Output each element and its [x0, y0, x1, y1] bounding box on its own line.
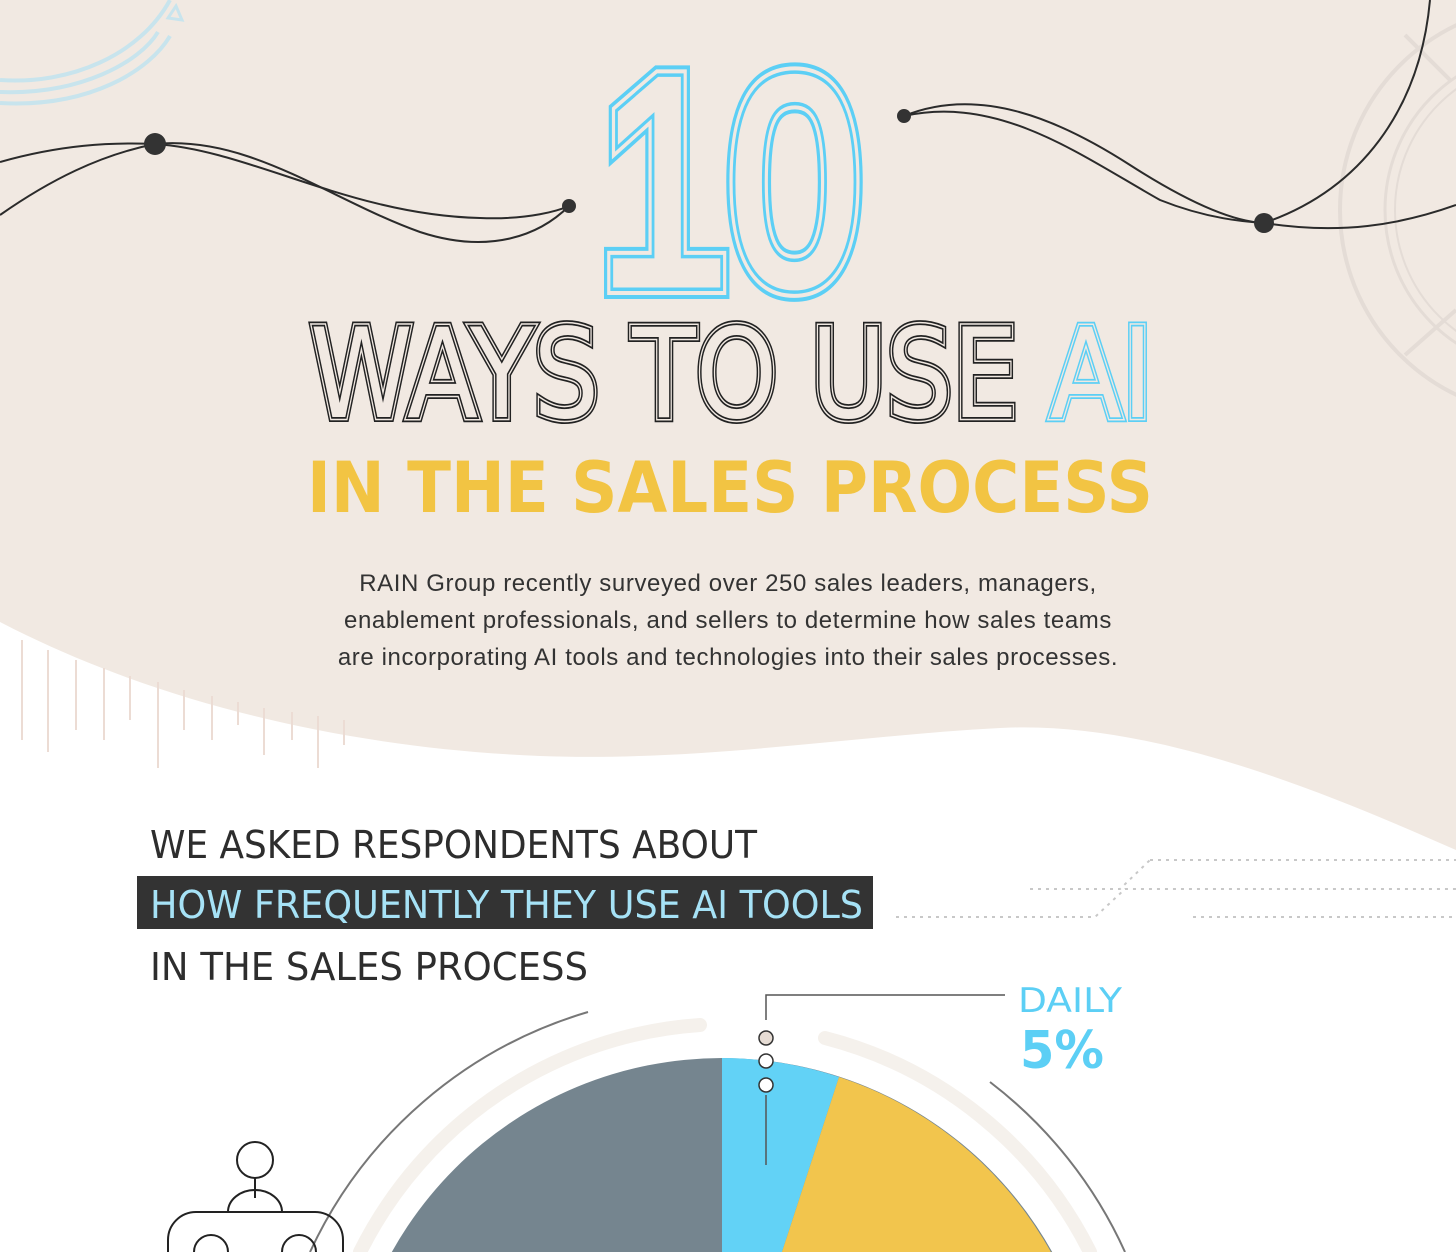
intro paragraph	[338, 570, 1118, 671]
title: ways to use ai: AI	[1050, 303, 1153, 447]
question heading: WE ASKED RESPONDENTS ABOUT	[150, 823, 758, 867]
decoration: top-right gray circles	[1340, 5, 1456, 415]
title: 10: 10	[598, 16, 860, 347]
intro paragraph: RAIN Group recently surveyed over 250 sales leaders, managers,	[359, 570, 1097, 597]
title: ways to use ai: WAYS TO USE	[310, 303, 1018, 447]
title: 10: 10	[598, 16, 860, 347]
question heading	[137, 823, 873, 989]
subtitle: IN THE SALES PROCESS	[307, 447, 1153, 529]
title: ways to use ai: WAYS TO USE	[310, 303, 1018, 447]
title: 10: 10	[598, 16, 860, 347]
title: ways to use ai: AI	[1050, 303, 1153, 447]
background beige wave	[0, 0, 1456, 850]
pie chart	[310, 1012, 1125, 1252]
title: ways to use ai: WAYS TO USE	[310, 303, 1018, 447]
question heading: HOW FREQUENTLY THEY USE AI TOOLS	[150, 883, 863, 927]
intro paragraph: are incorporating AI tools and technologies into their sales processes.	[338, 644, 1118, 671]
intro paragraph: enablement professionals, and sellers to determine how sales teams	[344, 607, 1112, 634]
decoration: top-left blue arcs	[0, 0, 182, 103]
title: 10: 10	[598, 16, 860, 347]
callout: daily 5%	[759, 981, 1122, 1165]
wires	[0, 0, 1456, 242]
callout: daily 5%: 5%	[1020, 1021, 1104, 1081]
dotted circuit lines	[896, 860, 1456, 917]
question heading: IN THE SALES PROCESS	[150, 945, 588, 989]
callout: daily 5%: DAILY	[1018, 981, 1122, 1021]
icon: robot	[168, 1142, 343, 1252]
title: ways to use ai: AI	[1050, 303, 1153, 447]
title: 10: 10	[598, 16, 860, 347]
title: ways to use ai: WAYS TO USE	[310, 303, 1018, 447]
title: ways to use ai: AI	[1050, 303, 1153, 447]
